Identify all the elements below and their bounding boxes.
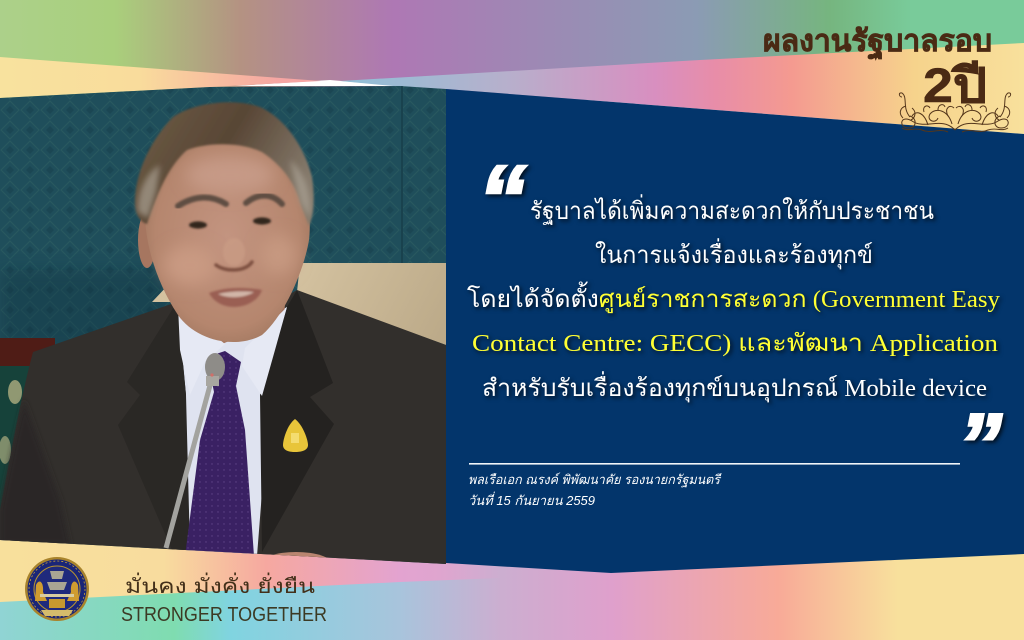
chair back bbox=[152, 263, 446, 345]
eyes bbox=[189, 217, 271, 229]
white gap at band convergence bbox=[235, 80, 400, 86]
grey temple hair bbox=[138, 160, 311, 218]
top rainbow band bbox=[0, 0, 1024, 100]
slogan english: STRONGER TOGETHER bbox=[121, 604, 327, 626]
quote line 3: โดยได้จัดตั้งศูนย์ราชการสะดวก (Government Easy bbox=[467, 281, 1000, 314]
wall shading bbox=[2, 272, 168, 343]
closing quotation mark: ” bbox=[958, 395, 1002, 494]
opening quotation mark: “ bbox=[478, 146, 526, 253]
attribution bbox=[468, 472, 722, 508]
wooden rail bbox=[0, 338, 55, 366]
top right yellow wedge bbox=[340, 43, 1024, 134]
collar left bbox=[178, 315, 224, 366]
collar right bbox=[260, 307, 287, 396]
slogan bbox=[121, 572, 327, 626]
left lapel bbox=[118, 302, 190, 550]
slogan thai: มั่นคง มั่งคั่ง ยั่งยืน bbox=[125, 572, 315, 598]
ornament left half bbox=[899, 93, 955, 132]
bottom gradient band bbox=[0, 540, 1024, 640]
wall seam bbox=[401, 86, 403, 266]
quote line 4: Contact Centre: GECC) และพัฒนา Application bbox=[472, 331, 998, 357]
ornament right half bbox=[955, 93, 1011, 132]
right lapel bbox=[260, 290, 334, 552]
shirt bbox=[178, 307, 287, 556]
attribution date: วันที่ 15 กันยายน 2559 bbox=[468, 491, 595, 508]
suit shadow bbox=[0, 400, 70, 545]
panel: navy quote background bbox=[446, 89, 1024, 573]
face bbox=[145, 130, 310, 342]
photo: portrait of speaker bbox=[0, 80, 446, 576]
suit jacket bbox=[0, 290, 446, 570]
bottom lower gradient wedge bbox=[0, 578, 1024, 640]
microphone head bbox=[205, 353, 225, 386]
attribution name: พลเรือเอก ณรงค์ พิพัฒนาคัย รองนายกรัฐมนตรี bbox=[468, 472, 722, 488]
quote line 5: สำหรับรับเรื่องร้องทุกข์บนอุปกรณ์ Mobile device bbox=[482, 371, 987, 403]
quote line 2: ในการแจ้งเรื่องและร้องทุกข์ bbox=[595, 238, 873, 270]
top left yellow wedge bbox=[0, 57, 321, 98]
nose bbox=[216, 238, 252, 270]
mouth bbox=[209, 288, 262, 307]
photo wall background bbox=[0, 80, 446, 570]
quote line 1: รัฐบาลได้เพิ่มความสะดวกให้กับประชาชน bbox=[530, 194, 934, 225]
eyebrows bbox=[178, 196, 282, 206]
title line 1: ผลงานรัฐบาลรอบ bbox=[763, 25, 992, 61]
hair bbox=[135, 102, 314, 226]
quote text bbox=[467, 194, 1000, 403]
ornament bbox=[899, 93, 1011, 132]
flower wallpaper bbox=[0, 366, 30, 508]
microphone stalk bbox=[166, 378, 212, 548]
tie bbox=[185, 351, 254, 556]
neck bbox=[221, 306, 285, 344]
title line 2: 2ปี bbox=[923, 60, 987, 113]
lapel badge bbox=[283, 419, 308, 452]
icon: government seal bbox=[25, 557, 89, 621]
cheek highlights bbox=[164, 157, 296, 285]
left ear bbox=[138, 218, 153, 268]
attribution rule bbox=[469, 463, 960, 465]
hand bbox=[273, 552, 326, 558]
title bbox=[763, 25, 992, 113]
